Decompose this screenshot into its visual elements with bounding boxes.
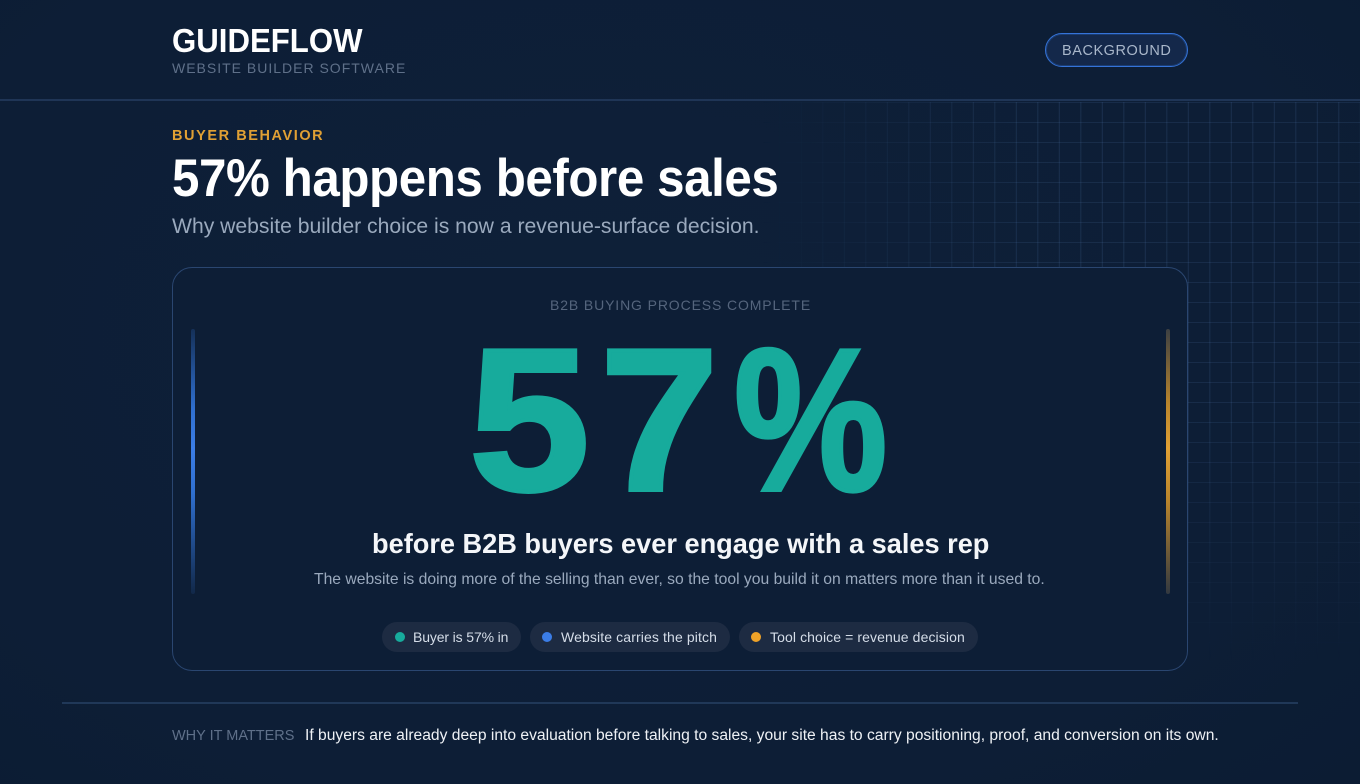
card label: B2B BUYING PROCESS COMPLETE	[550, 297, 811, 313]
footer text: If buyers are already deep into evaluation before talking to sales, your site has to carry positioning, proof, and conversion on its own.	[305, 726, 1219, 744]
pill: tool choice: Tool choice = revenue decision	[770, 629, 965, 645]
pill: website carries the pitch	[530, 622, 730, 652]
badge: background: BACKGROUND	[1062, 42, 1171, 58]
footer label: WHY IT MATTERS	[172, 728, 294, 744]
pill: buyer is 57% in	[382, 622, 521, 652]
pill: website carries the pitch: Website carries the pitch	[561, 629, 717, 645]
accent bar: blue	[190, 329, 194, 594]
badge: background	[1045, 33, 1188, 67]
header: brand name: GUIDEFLOW	[172, 22, 363, 59]
stat description: The website is doing more of the selling than ever, so the tool you build it on matters more than it used to.	[314, 571, 1045, 588]
pill: buyer is 57% in: Buyer is 57% in	[413, 629, 508, 645]
header: brand subtitle: WEBSITE BUILDER SOFTWARE	[172, 60, 406, 76]
dot: blue	[542, 632, 552, 642]
big stat: 57%: %	[734, 307, 888, 534]
stat caption: before B2B buyers ever engage with a sales rep	[372, 528, 989, 559]
panel: main stat card	[172, 267, 1188, 671]
big stat: 57%: 7	[600, 307, 719, 534]
dot: teal	[395, 632, 405, 642]
big stat: 57%: 5	[469, 307, 590, 534]
pill: tool choice	[739, 622, 978, 652]
dot: amber	[751, 632, 761, 642]
eyebrow: buyer behavior: BUYER BEHAVIOR	[172, 128, 324, 144]
title: 57% happens before sales	[172, 149, 778, 208]
subtitle: Why website builder choice is now a revenue-surface decision.	[172, 215, 760, 238]
accent bar: amber	[1166, 329, 1170, 594]
big stat: 57%	[469, 307, 888, 534]
